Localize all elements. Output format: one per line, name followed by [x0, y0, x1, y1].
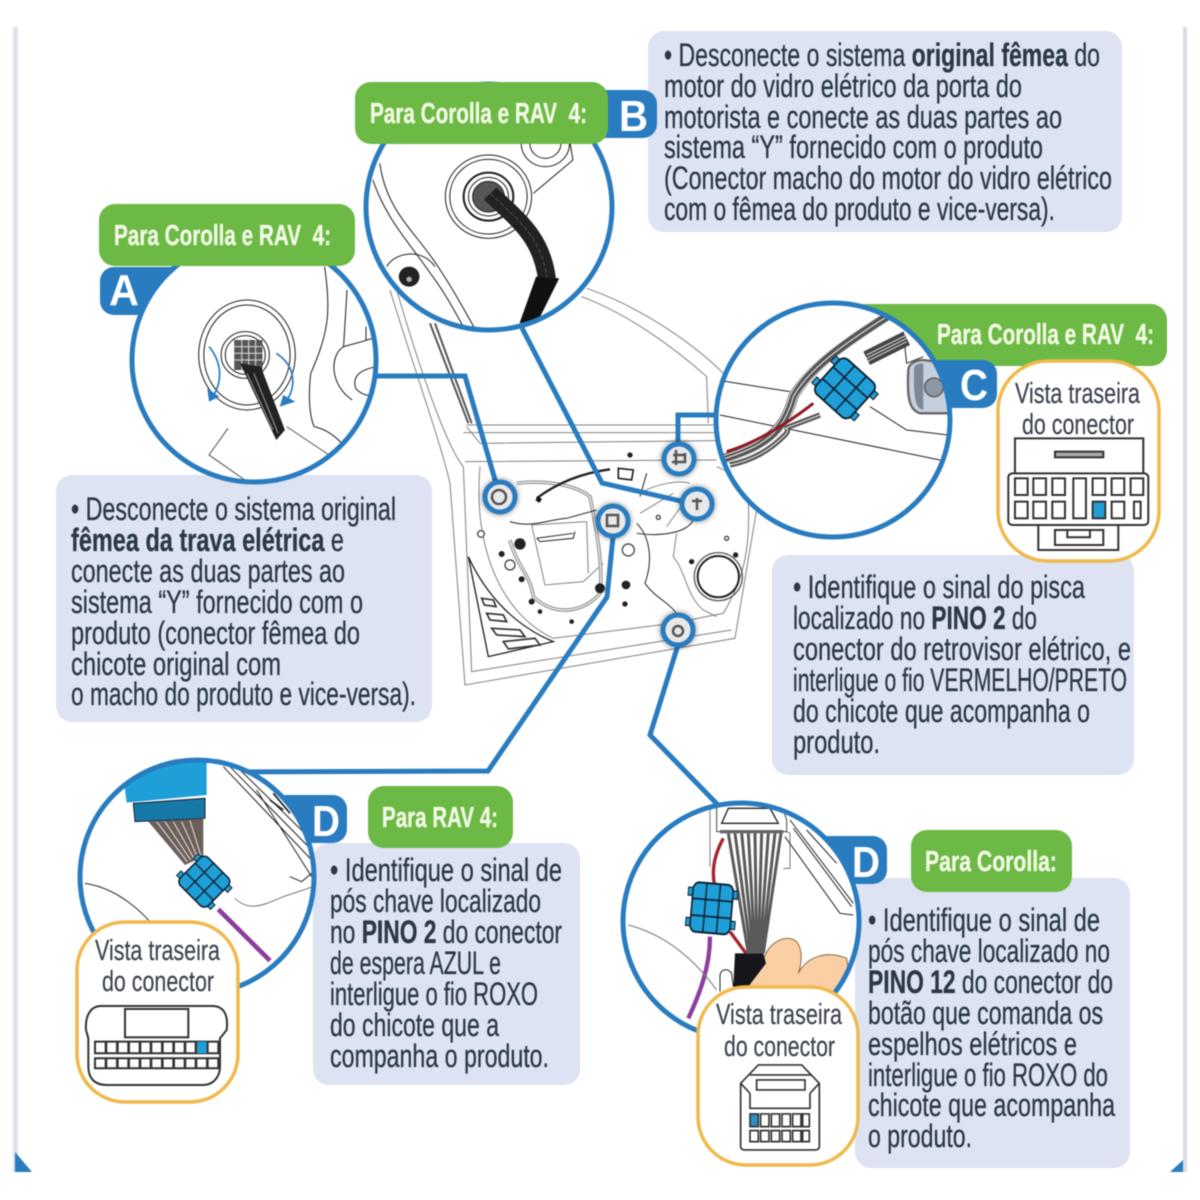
connector card C: do conector: [1022, 409, 1134, 441]
green pill B: [355, 82, 608, 144]
connector card C: Vista traseira: [1015, 378, 1141, 410]
green pill Corolla: Para Corolla:: [925, 846, 1057, 878]
instruction panel D Corolla: espelhos elétricos e: [868, 1026, 1077, 1062]
instruction panel A: [56, 475, 432, 722]
green pill B: Para Corolla e RAV 4:: [370, 98, 587, 130]
instruction panel C: [772, 555, 1134, 775]
detail circle D RAV 4: [80, 750, 314, 994]
badge B: [580, 90, 657, 141]
detail circle B: [366, 84, 612, 347]
instruction panel C: do chicote que acompanha o: [793, 693, 1090, 729]
instruction panel A: chicote original com: [71, 646, 281, 682]
detail circle C: [716, 303, 950, 537]
connector card D RAV 4: [77, 922, 238, 1102]
instruction panel D Corolla: o produto.: [868, 1118, 972, 1154]
instruction panel B: sistema “Y” fornecido com o produto: [664, 129, 1043, 165]
connector card D Corolla: do conector: [724, 1031, 835, 1063]
instruction panel A: • Desconecte o sistema original: [71, 491, 396, 527]
door hotspot rings: [485, 444, 712, 645]
instruction panel B: [648, 31, 1122, 232]
instruction panel A: o macho do produto e vice-versa).: [71, 676, 416, 712]
instruction panel B: motor do vidro elétrico da porta do: [664, 68, 1022, 104]
badge D left: D: [312, 797, 340, 846]
badge B: B: [619, 92, 648, 141]
instruction panel B: • Desconecte o sistema original fêmea do: [664, 37, 1100, 73]
green pill Corolla: [911, 830, 1072, 892]
instruction panel D Corolla: PINO 12 do conector do: [868, 964, 1113, 1000]
instruction panel D Corolla: botão que comanda os: [868, 995, 1103, 1031]
connector card D RAV 4: Vista traseira: [95, 935, 221, 967]
green pill A: [99, 204, 355, 266]
instruction panel B: com o fêmea do produto e vice-versa).: [664, 191, 1055, 227]
door illustration: [390, 288, 757, 685]
badge D right: D: [852, 838, 880, 887]
instruction panel D RAV 4: pós chave localizado: [330, 883, 541, 919]
instruction panel D RAV 4: interligue o fio ROXO: [330, 976, 538, 1012]
badge D left: [265, 795, 347, 846]
instruction panel A: sistema “Y” fornecido com o: [71, 584, 363, 620]
instruction panel B: motorista e conecte as duas partes ao: [664, 99, 1062, 135]
badge A: [100, 266, 190, 315]
detail circle A: [128, 265, 380, 486]
badge A: A: [109, 266, 139, 315]
green pill RAV 4: Para RAV 4:: [382, 802, 498, 834]
instruction panel C: • Identifique o sinal do pisca: [793, 569, 1085, 605]
connector card C: [998, 361, 1159, 561]
leader lines: [235, 328, 718, 805]
instruction panel D Corolla: [855, 878, 1130, 1168]
instruction panel C: produto.: [793, 724, 880, 760]
instruction panel D RAV 4: [313, 843, 580, 1085]
instruction panel C: localizado no PINO 2 do: [793, 600, 1037, 636]
connector card D Corolla: [698, 987, 858, 1165]
badge C: [920, 360, 997, 410]
instruction panel A: conecte as duas partes ao: [71, 553, 345, 589]
green pill C: [850, 304, 1167, 366]
green pill RAV 4: [368, 786, 513, 848]
instruction panel D Corolla: • Identifique o sinal de: [868, 902, 1100, 938]
instruction panel D RAV 4: • Identifique o sinal de: [330, 852, 562, 888]
instruction panel D Corolla: chicote que acompanha: [868, 1087, 1115, 1123]
instruction panel D Corolla: pós chave localizado no: [868, 933, 1110, 969]
instruction panel D RAV 4: de espera AZUL e: [330, 945, 501, 981]
instruction panel A: fêmea da trava elétrica e: [71, 522, 344, 558]
instruction panel D RAV 4: companha o produto.: [330, 1038, 549, 1074]
connector card D RAV 4: do conector: [102, 966, 214, 998]
instruction panel A: produto (conector fêmea do: [71, 615, 360, 651]
connector card D Corolla: Vista traseira: [716, 999, 843, 1031]
badge D right: [805, 836, 887, 887]
detail circle D Corolla: [623, 800, 859, 1039]
instruction panel D RAV 4: do chicote que a: [330, 1007, 499, 1043]
instruction panel D RAV 4: no PINO 2 do conector: [330, 914, 562, 950]
green pill A: Para Corolla e RAV 4:: [114, 220, 331, 252]
badge C: C: [960, 361, 988, 410]
